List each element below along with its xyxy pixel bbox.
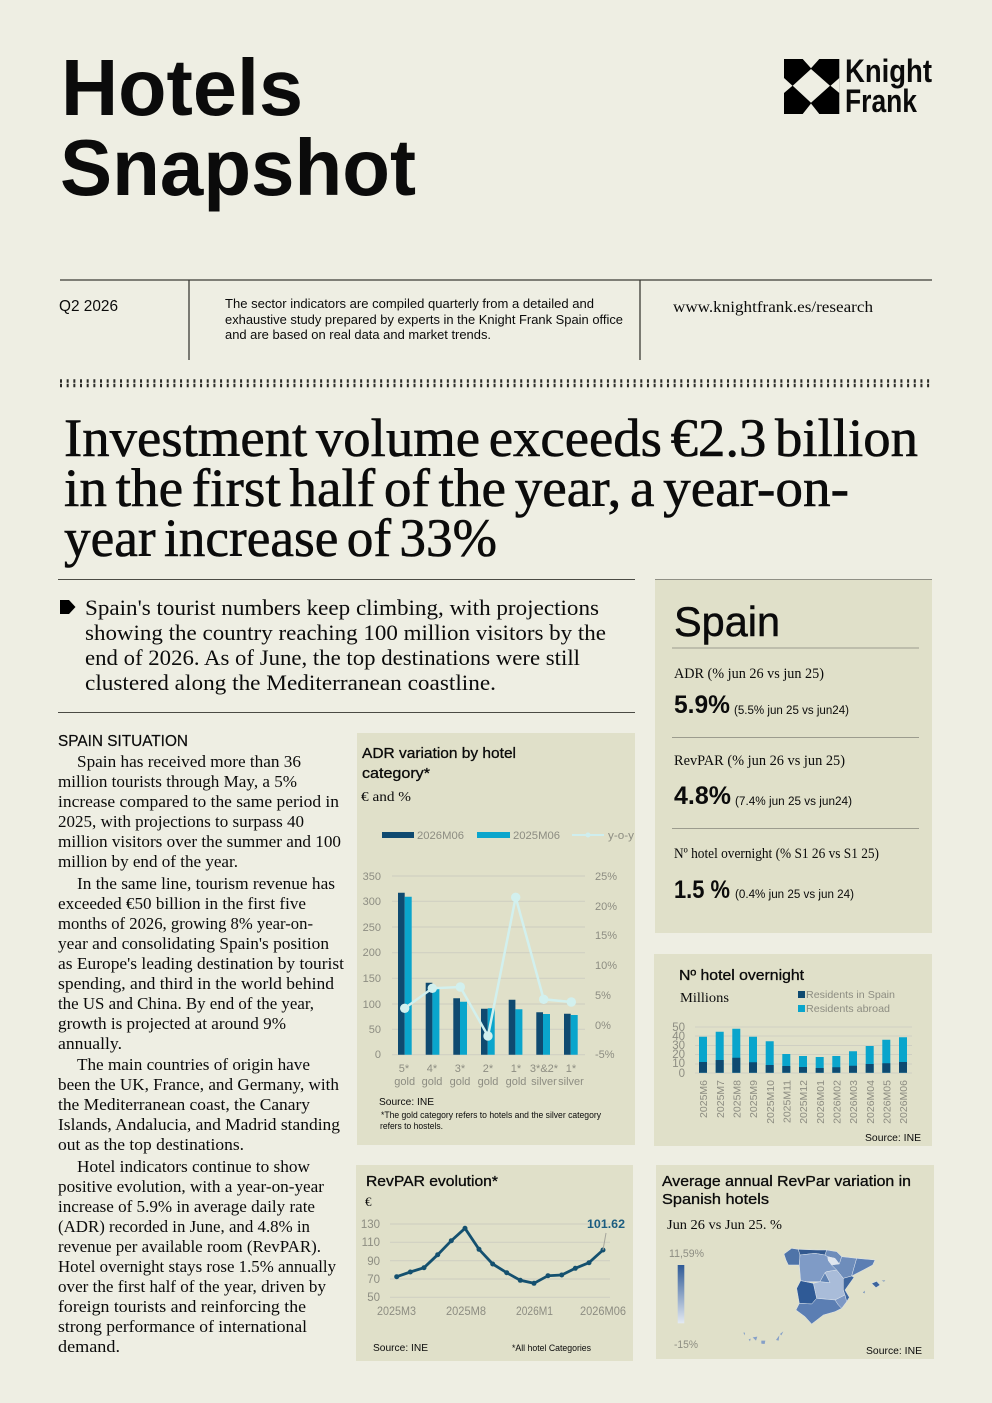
axes labels: 0%: [595, 1020, 611, 1032]
body text: 2025, with projections to surpass 40: [58, 812, 304, 831]
panel: hotel overnight chart: Millions: [680, 991, 729, 1006]
panel: hotel overnight chart: Nº hotel overnight: [679, 968, 804, 984]
axes labels: 5%: [595, 990, 611, 1002]
body text: been the UK, France, and Germany, with: [58, 1075, 340, 1094]
body text: spending, and third in the world behind: [58, 974, 335, 993]
axes labels: 130: [361, 1219, 380, 1231]
axes labels: 0: [679, 1068, 685, 1080]
panel: Spain indicators: (0.4% jun 25 vs jun 24): [735, 889, 854, 901]
axes labels: gold: [422, 1076, 442, 1088]
body text: positive evolution, with a year-on-year: [58, 1177, 325, 1196]
icon: bullet arrow: [60, 600, 76, 614]
axes labels: 1*: [566, 1063, 577, 1075]
intro text: clustered along the Mediterranean coastline.: [85, 670, 496, 695]
info strip: Q2 2026: [59, 298, 118, 315]
map legend: -15%: [674, 1339, 698, 1351]
axes labels: gold: [450, 1076, 470, 1088]
body text: growth is projected at around 9%: [58, 1014, 286, 1033]
body text: as Europe's leading destination by tourist: [58, 954, 344, 973]
intro text: showing the country reaching 100 million visitors by the: [85, 620, 606, 645]
axes labels: silver: [558, 1076, 584, 1088]
axes labels: 2*: [483, 1063, 494, 1075]
chart legend: Residents abroad: [806, 1003, 890, 1015]
panel: RevPAR map: [656, 1165, 934, 1359]
panel: RevPAR evolution chart: RevPAR evolution*: [366, 1174, 498, 1190]
chart legend: 2026M06: [417, 830, 464, 842]
body text: revenue per available room (RevPAR).: [58, 1237, 321, 1256]
axes labels: 200: [363, 947, 381, 959]
axes labels: 150: [363, 973, 381, 985]
body text: annually.: [58, 1034, 122, 1053]
axes labels: 10%: [595, 960, 617, 972]
axes labels: gold: [478, 1076, 498, 1088]
logo: Knight Frank: Knight: [845, 53, 932, 89]
axes labels: 2026M01: [815, 1080, 827, 1124]
chart legend: Residents in Spain: [806, 989, 895, 1001]
section heading: Spain situation: SPAIN SITUATION: [58, 733, 188, 750]
info strip: exhaustive study prepared by experts in the Knight Frank Spain office: [225, 312, 623, 327]
panel: hotel overnight chart: Source: INE: [865, 1132, 921, 1144]
chart legend: [798, 989, 895, 1015]
axes labels: 2025M8: [446, 1306, 486, 1318]
data label: 101.62: [587, 1219, 625, 1231]
axes labels: 15%: [595, 930, 617, 942]
chart legend: 2025M06: [513, 830, 560, 842]
panel: ADR variation chart: refers to hostels.: [380, 1121, 443, 1131]
axes labels: 300: [363, 896, 381, 908]
axes labels: 25%: [595, 871, 617, 883]
axes labels: gold: [506, 1076, 526, 1088]
axes labels: -5%: [595, 1049, 615, 1061]
axes labels: 2026M06: [898, 1080, 910, 1124]
axes labels: 50: [367, 1292, 380, 1304]
axes labels: 2025M10: [765, 1080, 777, 1124]
title: Snapshot: [60, 123, 416, 212]
info strip: www.knightfrank.es/research: [673, 299, 873, 316]
map of Spain: [743, 1248, 885, 1344]
body text: Islands, Andalucia, and Madrid standing: [58, 1115, 340, 1134]
panel: Spain indicators: 5.9%: [674, 691, 730, 719]
y-o-y line: [400, 893, 576, 1041]
panel: RevPAR evolution chart: €: [365, 1194, 372, 1209]
panel: Spain indicators: (7.4% jun 25 vs jun24): [735, 796, 852, 808]
body text: over the first half of the year, driven by: [58, 1277, 327, 1296]
panel: Spain indicators: ADR (% jun 26 vs jun 25): [674, 666, 824, 682]
bars: [699, 1029, 907, 1073]
panel: ADR variation chart: category*: [362, 765, 430, 782]
panel: ADR variation chart: Source: INE: [379, 1096, 434, 1108]
axes labels: 2025M3: [377, 1306, 416, 1318]
panel: Spain indicators: 4.8%: [674, 782, 731, 810]
axes labels: 90: [367, 1256, 380, 1268]
axes labels: 1*: [511, 1063, 522, 1075]
title: [60, 43, 416, 212]
body text: million tourists through May, a 5%: [58, 772, 297, 791]
axes labels: 40: [672, 1031, 685, 1043]
axes labels: 70: [367, 1274, 380, 1286]
axes labels: [361, 1219, 626, 1318]
axes labels: [672, 1022, 910, 1124]
panel: ADR variation chart: € and %: [361, 789, 411, 804]
body text: In the same line, tourism revenue has: [77, 874, 335, 893]
body text: out as the top destinations.: [58, 1135, 244, 1154]
panel: ADR variation chart: *The gold category refers to hotels and the silver category: [381, 1110, 601, 1120]
info strip: and are based on real data and market trends.: [225, 327, 491, 342]
axes labels: 2026M04: [865, 1080, 877, 1124]
axes labels: 2026M03: [848, 1080, 860, 1124]
axes labels: 2026M06: [580, 1306, 626, 1318]
axes labels: 50: [369, 1024, 381, 1036]
info strip: [59, 280, 932, 360]
body text: million visitors over the summer and 100: [58, 832, 341, 851]
panel: Spain indicators: [655, 579, 932, 933]
axes labels: 50: [672, 1022, 685, 1034]
panel: hotel overnight chart: [654, 954, 932, 1146]
axes labels: 250: [363, 922, 381, 934]
panel: RevPAR map: Spanish hotels: [662, 1192, 769, 1208]
axes labels: 110: [362, 1237, 380, 1249]
panel: ADR variation chart: [357, 733, 635, 1145]
bars: [398, 893, 578, 1055]
headline: Investment volume exceeds €2.3 billion: [64, 408, 918, 468]
map legend: 11,59%: [669, 1248, 704, 1260]
panel: RevPAR evolution chart: [356, 1165, 633, 1361]
chart legend: y-o-y: [608, 830, 635, 842]
line series: [394, 1226, 606, 1286]
body text: the US and China. By end of the year,: [58, 994, 314, 1013]
axes labels: 3*: [455, 1063, 466, 1075]
body text: increase of 5.9% in average daily rate: [58, 1197, 315, 1216]
headline: year increase of 33%: [64, 508, 497, 568]
body text: [58, 752, 344, 1356]
logo: Knight Frank: [784, 53, 932, 119]
panel: RevPAR map: Source: INE: [866, 1345, 922, 1357]
title: Hotels: [61, 43, 303, 132]
axes labels: 2025M9: [748, 1080, 760, 1118]
axes labels: 5*: [399, 1063, 410, 1075]
axes labels: 30: [672, 1040, 685, 1052]
intro text: Spain's tourist numbers keep climbing, with projections: [85, 595, 599, 620]
panel: Spain indicators: RevPAR (% jun 26 vs jun 25): [674, 753, 845, 769]
panel: RevPAR evolution chart: *All hotel Categories: [512, 1343, 591, 1353]
body text: The main countries of origin have: [77, 1055, 310, 1074]
axes labels: 100: [363, 999, 381, 1011]
body text: Spain has received more than 36: [77, 752, 301, 771]
axes labels: [363, 871, 617, 1088]
axes labels: 10: [672, 1058, 685, 1070]
axes labels: 3*&2*: [530, 1063, 559, 1075]
headline: [64, 408, 918, 568]
panel: RevPAR evolution chart: Source: INE: [373, 1342, 428, 1354]
body text: increase compared to the same period in: [58, 792, 339, 811]
info strip: The sector indicators are compiled quarterly from a detailed and: [225, 296, 594, 311]
panel: Spain indicators: Spain: [674, 598, 780, 645]
panel: ADR variation chart: ADR variation by hotel: [362, 745, 516, 762]
axes labels: silver: [531, 1076, 557, 1088]
axes labels: 20%: [595, 901, 617, 913]
map legend: [669, 1248, 704, 1351]
panel: Spain indicators: 1.5 %: [674, 876, 730, 904]
body text: foreign tourists and reinforcing the: [58, 1297, 306, 1316]
axes labels: 2025M7: [715, 1080, 727, 1118]
axes labels: 20: [672, 1049, 685, 1061]
panel: RevPAR map: Jun 26 vs Jun 25. %: [667, 1217, 782, 1232]
axes labels: 2025M12: [798, 1080, 810, 1124]
body text: the Mediterranean coast, the Canary: [58, 1095, 311, 1114]
axes labels: 2026M05: [882, 1080, 894, 1124]
axes labels: 0: [375, 1049, 381, 1061]
chart legend: [382, 830, 635, 842]
body text: months of 2026, growing 8% year-on-: [58, 914, 313, 933]
intro text: end of 2026. As of June, the top destinations were still: [85, 645, 580, 670]
headline: in the first half of the year, a year-on-: [64, 458, 849, 518]
panel: RevPAR map: Average annual RevPar variation in: [662, 1174, 911, 1190]
axes labels: 350: [363, 871, 381, 883]
axes labels: 2025M6: [698, 1080, 710, 1118]
panel: Spain indicators: Nº hotel overnight (% S1 26 vs S1 25): [674, 846, 879, 862]
body text: year and consolidating Spain's position: [58, 934, 329, 953]
logo: Knight Frank: Frank: [845, 83, 917, 119]
axes labels: gold: [394, 1076, 415, 1088]
body text: demand.: [58, 1337, 120, 1356]
body text: strong performance of international: [58, 1317, 307, 1336]
body text: Hotel indicators continue to show: [77, 1157, 310, 1176]
body text: million by end of the year.: [58, 852, 238, 871]
panel: Spain indicators: (5.5% jun 25 vs jun24): [734, 705, 849, 717]
body text: Hotel overnight stays rose 1.5% annually: [58, 1257, 337, 1276]
body text: exceeded €50 billion in the first five: [58, 894, 306, 913]
intro text: [85, 595, 606, 695]
axes labels: 4*: [427, 1063, 438, 1075]
axes labels: 2025M8: [732, 1080, 744, 1118]
axes labels: 2026M02: [832, 1080, 844, 1124]
axes labels: 2026M1: [516, 1306, 553, 1318]
axes labels: 2025M11: [782, 1080, 794, 1123]
body text: (ADR) recorded in June, and 4.8% in: [58, 1217, 310, 1236]
